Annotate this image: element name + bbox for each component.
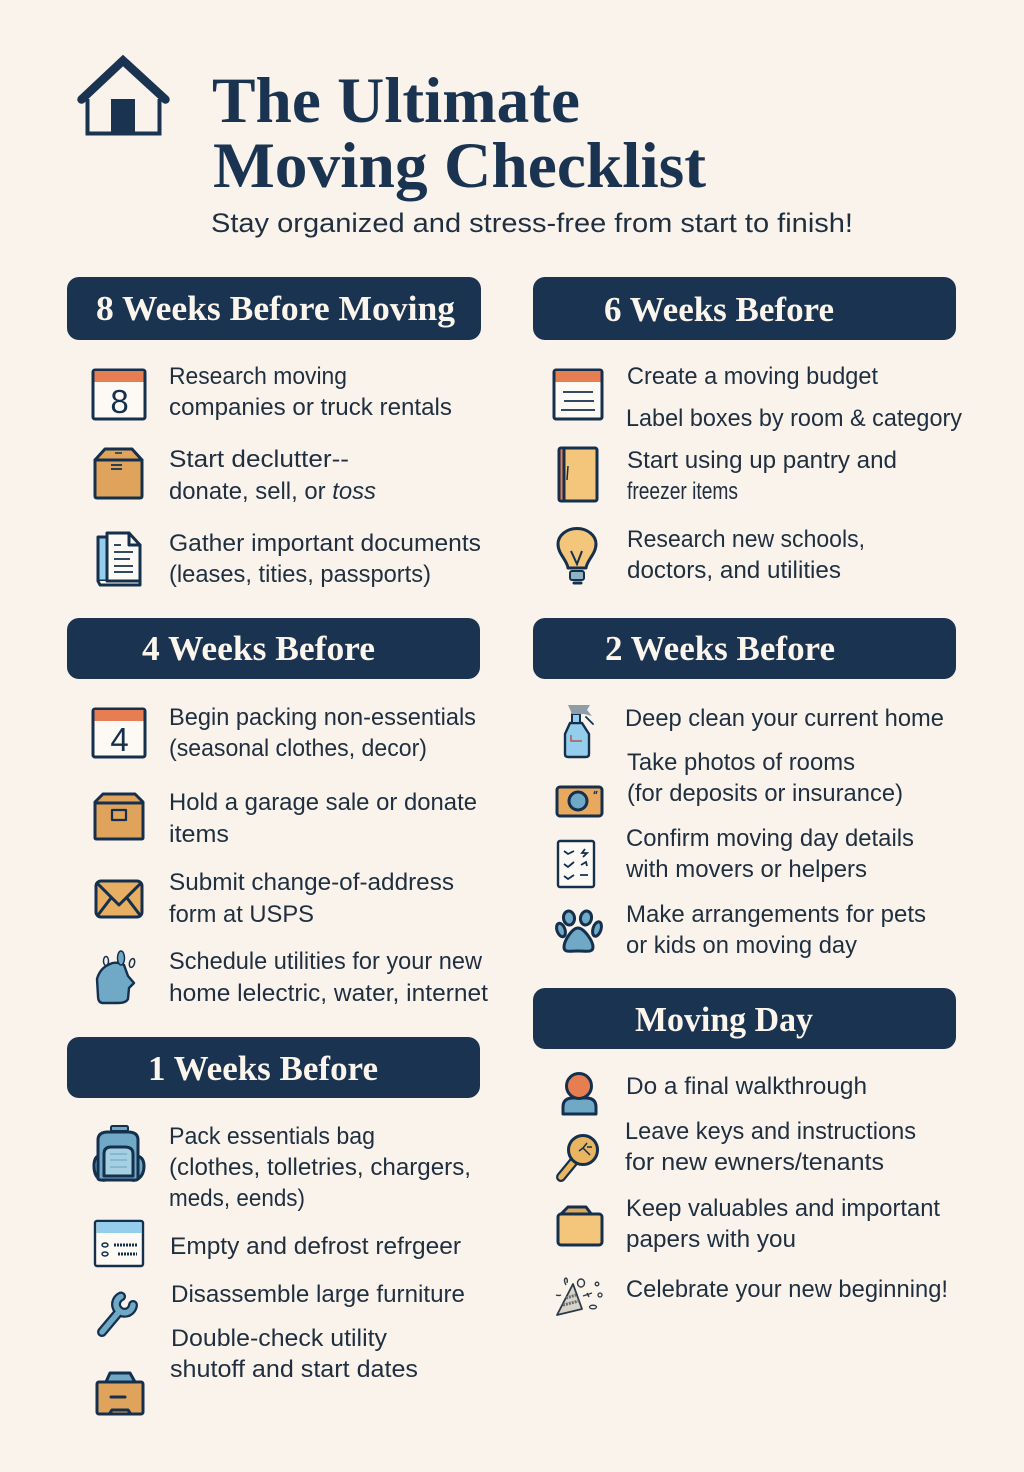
- item: research companies: [93, 363, 452, 421]
- icon: calendar 4: 4: [110, 721, 129, 758]
- item: photos: [557, 749, 903, 816]
- text: utilities: Schedule utilities for your new: [169, 948, 482, 975]
- heading: 6 weeks: [533, 277, 956, 340]
- icon: spray bottle: [565, 705, 593, 757]
- icon: box with label: [95, 794, 143, 839]
- item: refrigerator: [95, 1221, 461, 1266]
- text: pets: or kids on moving day: [626, 932, 858, 959]
- text: packing: Begin packing non-essentials: [169, 704, 476, 731]
- text: keys: Leave keys and instructions: [625, 1118, 916, 1145]
- icon: backpack: [94, 1126, 144, 1180]
- text: photos: [627, 749, 903, 807]
- text: walkthrough: Do a final walkthrough: [626, 1073, 867, 1100]
- text: confirm details: [625, 825, 914, 883]
- item: furniture: [102, 1281, 465, 1332]
- text: photos: (for deposits or insurance): [627, 780, 903, 807]
- text: pantry: Start using up pantry and: [627, 447, 897, 474]
- panel: moving day: [533, 988, 956, 1315]
- text: research schools: doctors, and utilities: [627, 557, 841, 584]
- heading: 8 weeks: [67, 277, 481, 340]
- item: budget: [554, 363, 878, 419]
- title: [212, 65, 706, 202]
- text: pets: Make arrangements for pets: [626, 901, 926, 928]
- icon: calendar 8: 8: [110, 383, 129, 420]
- text: pets: [626, 901, 926, 959]
- title: Moving Checklist: [213, 130, 706, 202]
- text: packing: [169, 704, 476, 762]
- header: title block: [82, 60, 853, 238]
- text: deep clean: Deep clean your current home: [625, 705, 944, 732]
- text: keys: for new ewners/tenants: [625, 1149, 884, 1176]
- heading: 2 weeks: 2 Weeks Before: [605, 629, 835, 668]
- item: research schools: [558, 526, 865, 584]
- item: essentials bag: [94, 1123, 471, 1212]
- icon: cardboard box: [95, 449, 142, 498]
- icon: file drawer: [97, 1373, 143, 1414]
- item: label boxes: Label boxes by room & category: [626, 405, 963, 432]
- text: utility check: Double-check utility: [171, 1325, 388, 1352]
- heading: moving day: [533, 988, 956, 1049]
- text: utility check: [170, 1325, 418, 1383]
- item: deep clean: [565, 705, 944, 757]
- text: packing: (seasonal clothes, decor): [169, 735, 427, 762]
- text: garage sale: [169, 789, 477, 848]
- icon: folder: [558, 1207, 602, 1245]
- text: essentials bag: Pack essentials bag: [169, 1123, 375, 1150]
- item: walkthrough: [563, 1073, 867, 1114]
- item: garage sale: [95, 789, 477, 848]
- icon: wrench: [102, 1296, 133, 1332]
- icon: party hat: [556, 1278, 602, 1315]
- text: research companies: Research moving: [169, 363, 347, 390]
- text: research companies: [169, 363, 452, 421]
- item: utility check: [97, 1325, 418, 1414]
- heading: 8 weeks: 8 Weeks Before Moving: [96, 289, 455, 328]
- icon: paw print: [555, 910, 603, 951]
- text: valuables: Keep valuables and important: [626, 1195, 940, 1222]
- text: valuables: papers with you: [626, 1226, 796, 1253]
- panel: 6 weeks before: [533, 277, 963, 584]
- icon: house: [82, 60, 166, 134]
- text: change of address: [169, 869, 454, 928]
- icon: document: [98, 533, 140, 585]
- item: celebrate: [556, 1276, 948, 1315]
- item: utilities: [97, 948, 488, 1007]
- item: documents: [98, 530, 481, 588]
- heading: 2 weeks: [533, 618, 956, 679]
- text: pantry: [627, 447, 897, 505]
- text: pantry: freezer items: [627, 478, 738, 505]
- text: valuables: [626, 1195, 940, 1253]
- item: declutter: [95, 446, 376, 505]
- panel: 8 weeks before moving: [67, 277, 481, 588]
- text: utilities: home lelectric, water, internet: [169, 980, 488, 1007]
- icon: checklist: [558, 841, 594, 887]
- text: keys: [625, 1118, 916, 1176]
- text: garage sale: Hold a garage sale or donate: [169, 789, 477, 816]
- text: photos: Take photos of rooms: [627, 749, 855, 776]
- text: refrigerator: Empty and defrost refrgeer: [170, 1233, 461, 1260]
- icon: camera: [557, 787, 602, 816]
- panel: 4 weeks before: [67, 618, 488, 1007]
- heading: 1 weeks: 1 Weeks Before: [148, 1049, 378, 1088]
- text: essentials bag: [169, 1123, 471, 1212]
- title: The Ultimate: [212, 65, 580, 137]
- icon: notebook: [559, 448, 597, 501]
- text: utility check: shutoff and start dates: [170, 1356, 418, 1383]
- heading: 4 weeks: [67, 618, 480, 679]
- icon: envelope: [96, 881, 142, 917]
- text: garage sale: items: [169, 821, 229, 848]
- text: utilities: [169, 948, 488, 1007]
- heading: 6 weeks: 6 Weeks Before: [604, 290, 834, 329]
- subtitle: Stay organized and stress-free from start to finish!: [211, 208, 853, 238]
- icon: calendar 4: [93, 709, 145, 758]
- icon: person: [563, 1074, 596, 1114]
- text: documents: Gather important documents: [169, 530, 481, 557]
- icon: light bulb: [558, 528, 596, 583]
- text: declutter: donate, sell, or toss: [169, 478, 376, 505]
- icon: defrost panel: [95, 1221, 143, 1266]
- panel: 1 weeks before: [67, 1037, 480, 1414]
- item: packing: [93, 704, 476, 762]
- item: keys: [561, 1118, 916, 1177]
- text: confirm details: with movers or helpers: [625, 856, 867, 883]
- text: change of address: form at USPS: [169, 901, 314, 928]
- text: documents: [169, 530, 481, 588]
- text: declutter: [169, 446, 376, 505]
- text: essentials bag: (clothes, tolletries, chargers,: [169, 1154, 471, 1181]
- item: confirm details: [558, 825, 914, 887]
- item: pets: [555, 901, 926, 959]
- text: celebrate: Celebrate your new beginning!: [626, 1276, 948, 1303]
- text: research schools: [627, 526, 865, 584]
- text: essentials bag: meds, eends): [169, 1185, 305, 1212]
- icon: blue utility blob: [97, 951, 136, 1003]
- text: research companies: companies or truck rentals: [169, 394, 452, 421]
- heading: moving day: Moving Day: [635, 1000, 813, 1039]
- icon: key: [561, 1136, 598, 1177]
- icon: budget sheet: [554, 370, 602, 419]
- text: budget: Create a moving budget: [627, 363, 878, 390]
- text: confirm details: Confirm moving day details: [626, 825, 914, 852]
- heading: 1 weeks: [67, 1037, 480, 1098]
- heading: 4 weeks: 4 Weeks Before: [142, 629, 375, 668]
- panel: 2 weeks before: [533, 618, 956, 959]
- text: furniture: Disassemble large furniture: [171, 1281, 465, 1308]
- item: pantry: [559, 447, 897, 505]
- item: change of address: [96, 869, 454, 928]
- item: valuables: [558, 1195, 940, 1253]
- text: research schools: Research new schools,: [627, 526, 865, 553]
- icon: calendar 8: [93, 370, 145, 420]
- text: change of address: Submit change-of-address: [169, 869, 454, 896]
- text: documents: (leases, tities, passports): [169, 561, 431, 588]
- text: declutter: Start declutter--: [169, 446, 349, 473]
